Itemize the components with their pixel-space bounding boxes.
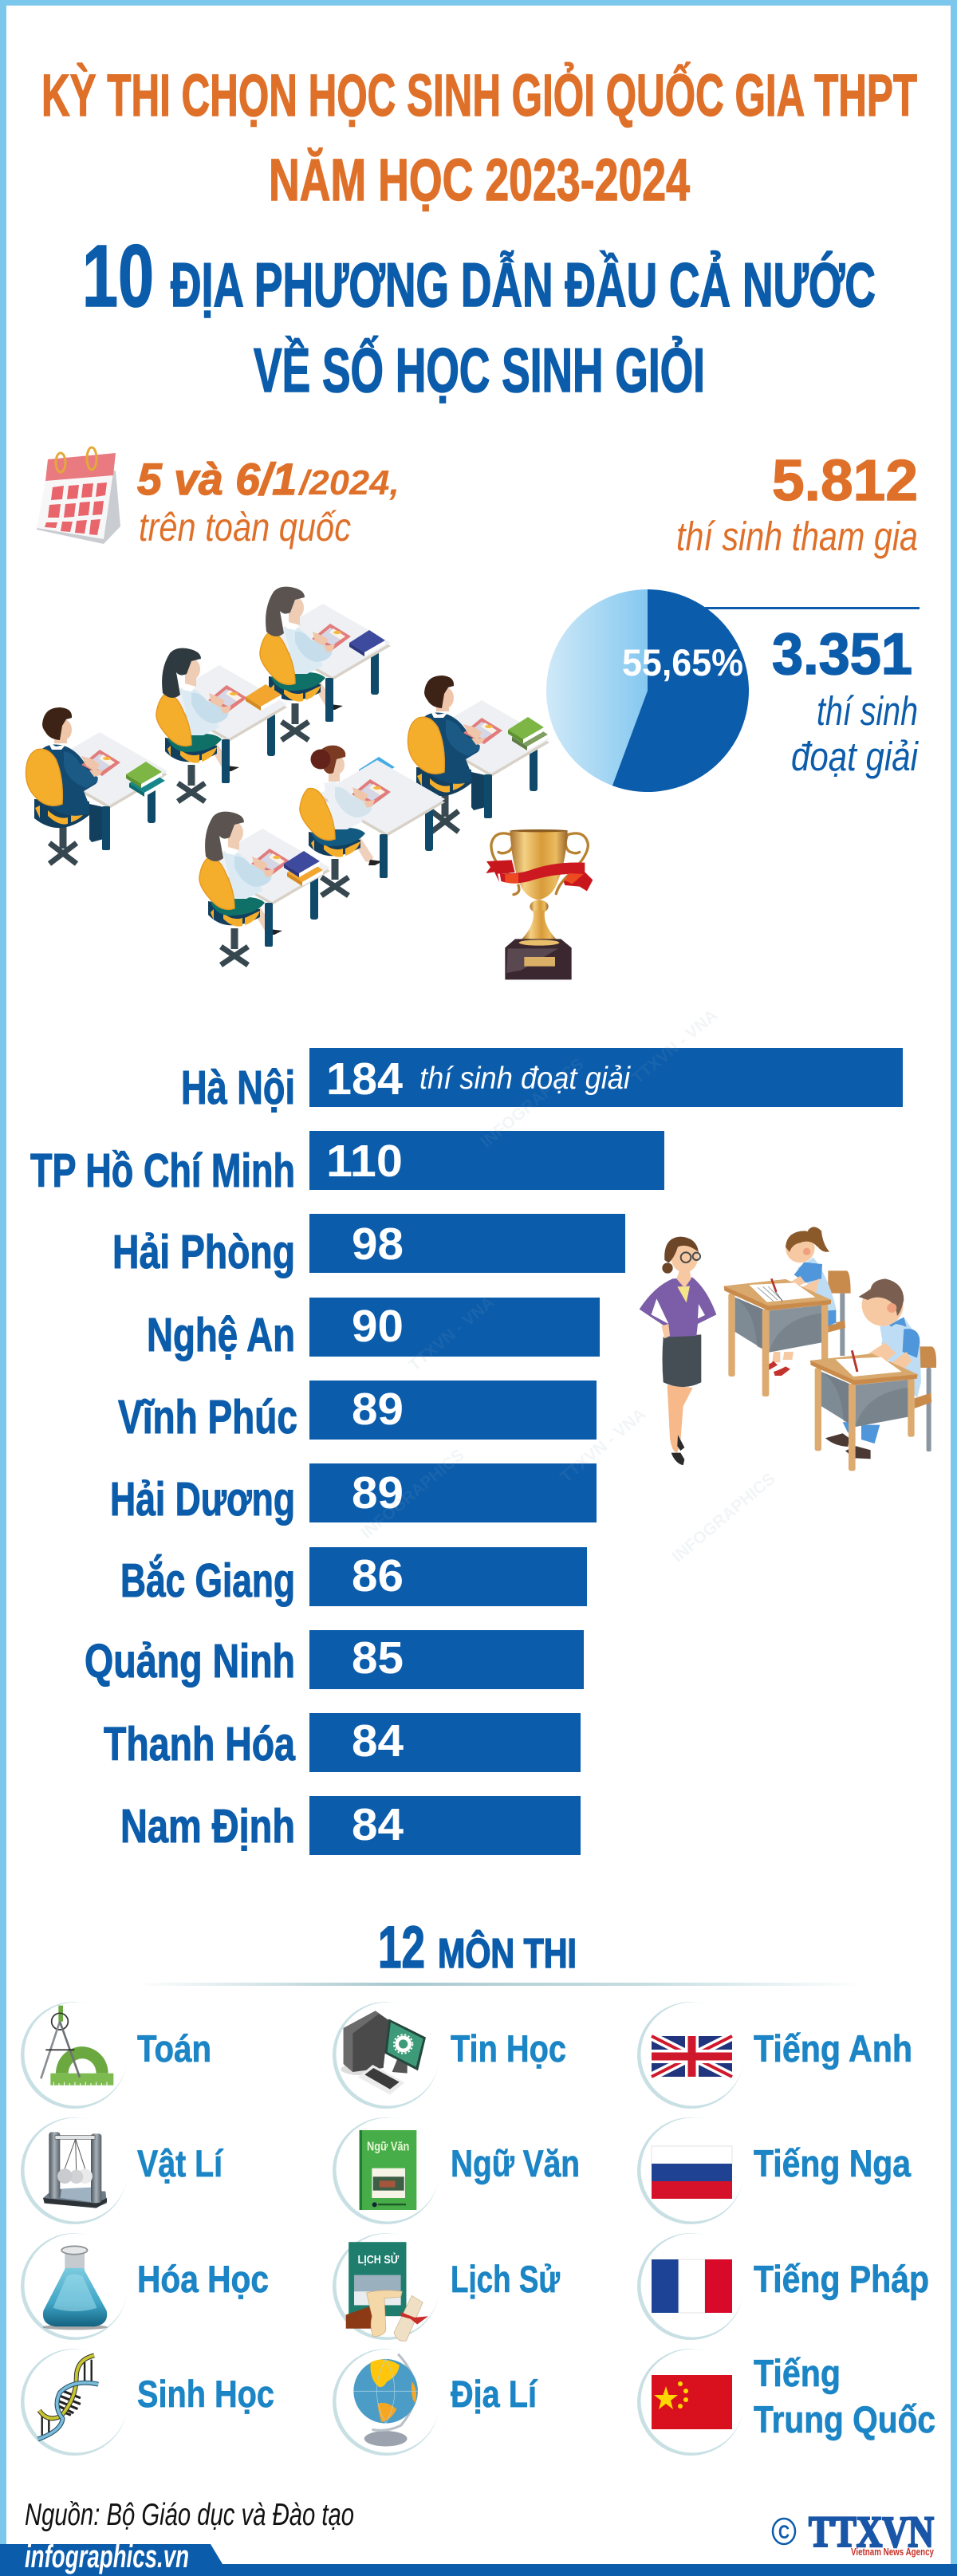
label: Lịch Sử bbox=[451, 2258, 561, 2300]
percent label: 55,65% bbox=[622, 641, 743, 683]
number of winners: 3.351 bbox=[772, 622, 912, 687]
flag: Russia bbox=[652, 2146, 732, 2199]
flag: China bbox=[652, 2375, 732, 2429]
row: Vĩnh Phúc: Vĩnh Phúc bbox=[118, 1391, 297, 1444]
section heading: 12 subjects bbox=[378, 1914, 577, 1980]
subtitle line 2: VỀ SỐ HỌC SINH GIỎI bbox=[254, 335, 705, 405]
watermark: TTXVN - VNA bbox=[628, 1006, 721, 1088]
row: Nghệ An: 90 bbox=[352, 1301, 404, 1352]
row: Vĩnh Phúc: 89 bbox=[352, 1384, 404, 1435]
label: Sinh Học bbox=[137, 2373, 274, 2415]
label: Toán bbox=[137, 2027, 211, 2070]
subject: Tiếng Trung Quốc bbox=[637, 2349, 935, 2456]
student 3 bbox=[260, 587, 391, 740]
horizontal bar chart: winners by locality bbox=[30, 1048, 903, 1855]
logo: TTXVN bbox=[773, 2507, 935, 2558]
divider bbox=[137, 1983, 864, 1986]
row: Hà Nội: 184 bbox=[326, 1054, 403, 1105]
winners caption line 1: thí sinh bbox=[817, 688, 918, 734]
row: Quảng Ninh bbox=[85, 1630, 584, 1689]
row: Vĩnh Phúc bbox=[118, 1381, 597, 1444]
subject: Toán bbox=[21, 2002, 211, 2109]
watermark: TTXVN - VNA bbox=[405, 1293, 498, 1375]
row: Hà Nội bbox=[181, 1048, 903, 1114]
participants figure bbox=[676, 449, 918, 559]
subject: Hóa Học bbox=[21, 2233, 269, 2340]
student 1 bbox=[26, 707, 167, 864]
row: Nam Định: 84 bbox=[352, 1799, 404, 1850]
footer band bbox=[0, 2539, 957, 2576]
location: trên toàn quốc bbox=[139, 505, 351, 549]
subject: Ngữ Văn bbox=[333, 2117, 580, 2224]
teacher bbox=[640, 1237, 716, 1465]
subject: Lịch Sử bbox=[333, 2233, 561, 2341]
watermark bbox=[357, 1006, 779, 1566]
source note: Nguồn: Bộ Giáo dục và Đào tạo bbox=[25, 2498, 354, 2532]
row: Nghệ An bbox=[147, 1298, 600, 1361]
row: Thanh Hóa bbox=[104, 1713, 581, 1772]
row: Nghệ An: Nghệ An bbox=[147, 1309, 295, 1361]
girl at desk bbox=[724, 1227, 851, 1396]
subject: Ngữ Văn: Ngữ Văn bbox=[367, 2141, 409, 2154]
subject: Địa Lí bbox=[333, 2349, 538, 2456]
label: Địa Lí bbox=[451, 2373, 538, 2415]
icon: trophy bbox=[486, 829, 593, 979]
row: Hải Dương: Hải Dương bbox=[110, 1473, 295, 1526]
subject: Tin Học bbox=[333, 2002, 566, 2109]
subject: Sinh Học bbox=[21, 2349, 274, 2456]
illustration: teacher and students bbox=[640, 1227, 936, 1471]
subject: Vật Lí bbox=[21, 2117, 224, 2224]
heading label: MÔN THI bbox=[438, 1930, 577, 1977]
row: TP Hồ Chí Minh bbox=[30, 1131, 664, 1197]
copyright mark: C bbox=[778, 2522, 790, 2543]
row: Hà Nội: Hà Nội bbox=[181, 1062, 295, 1114]
row: Hải Dương: 89 bbox=[352, 1467, 404, 1518]
winners caption line 2: đoạt giải bbox=[791, 734, 919, 779]
watermark: INFOGRAPHICS bbox=[357, 1446, 468, 1542]
row: Hải Phòng: Hải Phòng bbox=[112, 1226, 295, 1278]
label: Tiếng Anh bbox=[754, 2027, 912, 2070]
watermark: INFOGRAPHICS bbox=[477, 1055, 588, 1152]
row: Nam Định bbox=[120, 1796, 581, 1855]
row: Hải Dương bbox=[110, 1463, 597, 1526]
number of candidates: 5.812 bbox=[772, 449, 918, 513]
watermark: TTXVN - VNA bbox=[557, 1404, 649, 1487]
watermark: INFOGRAPHICS bbox=[668, 1470, 779, 1566]
pie chart: share of winners bbox=[546, 589, 749, 792]
boy at desk bbox=[810, 1278, 936, 1471]
row: Hà Nội: thí sinh đoạt giải bbox=[419, 1062, 631, 1096]
row: Hải Phòng: 98 bbox=[352, 1219, 404, 1270]
flag: UK bbox=[652, 2036, 732, 2077]
row: TP Hồ Chí Minh: TP Hồ Chí Minh bbox=[30, 1144, 295, 1197]
year: /2024, bbox=[297, 463, 400, 502]
student 4 bbox=[408, 676, 549, 832]
students at desks illustration bbox=[26, 587, 549, 965]
label line 1: Tiếng bbox=[754, 2352, 841, 2394]
flag: France bbox=[652, 2259, 732, 2313]
student 6 bbox=[199, 812, 330, 965]
subject: Tiếng Nga bbox=[637, 2117, 912, 2224]
row: Thanh Hóa: Thanh Hóa bbox=[104, 1718, 296, 1771]
label: Hóa Học bbox=[137, 2258, 269, 2300]
copyright mark bbox=[773, 2519, 795, 2544]
row: Quảng Ninh: Quảng Ninh bbox=[85, 1635, 295, 1688]
subject: Tiếng Anh bbox=[637, 2002, 912, 2109]
student 5 bbox=[300, 746, 445, 896]
label: Ngữ Văn bbox=[451, 2142, 580, 2184]
title: exam name bbox=[41, 62, 917, 213]
student 2 bbox=[156, 648, 287, 802]
row: TP Hồ Chí Minh: 110 bbox=[326, 1136, 403, 1187]
subject: Tiếng Pháp bbox=[637, 2233, 929, 2340]
row: Thanh Hóa: 84 bbox=[352, 1715, 404, 1767]
leader line bbox=[705, 607, 920, 609]
date: 5 và 6/1 bbox=[137, 454, 297, 504]
icon: calendar bbox=[37, 447, 120, 544]
row: Bắc Giang bbox=[120, 1547, 587, 1607]
row: Nam Định: Nam Định bbox=[120, 1800, 295, 1853]
website: infographics.vn bbox=[25, 2539, 189, 2574]
subtitle: top 10 localities bbox=[82, 227, 876, 405]
subject: Lịch Sử: LỊCH SỬ bbox=[358, 2252, 399, 2267]
row: Hải Phòng bbox=[112, 1214, 625, 1278]
title line 2: NĂM HỌC 2023-2024 bbox=[269, 147, 690, 213]
row: Bắc Giang: Bắc Giang bbox=[120, 1554, 295, 1607]
row: Bắc Giang: 86 bbox=[352, 1550, 404, 1601]
winners figure bbox=[772, 622, 919, 779]
label: Vật Lí bbox=[137, 2142, 224, 2184]
label: Tin Học bbox=[451, 2027, 566, 2070]
row: Quảng Ninh: 85 bbox=[352, 1633, 404, 1684]
big number 10: 10 bbox=[82, 227, 154, 325]
number 12: 12 bbox=[378, 1914, 425, 1980]
label: Tiếng Nga bbox=[754, 2142, 912, 2184]
exam date text bbox=[137, 454, 400, 549]
label: Tiếng Pháp bbox=[754, 2258, 929, 2300]
